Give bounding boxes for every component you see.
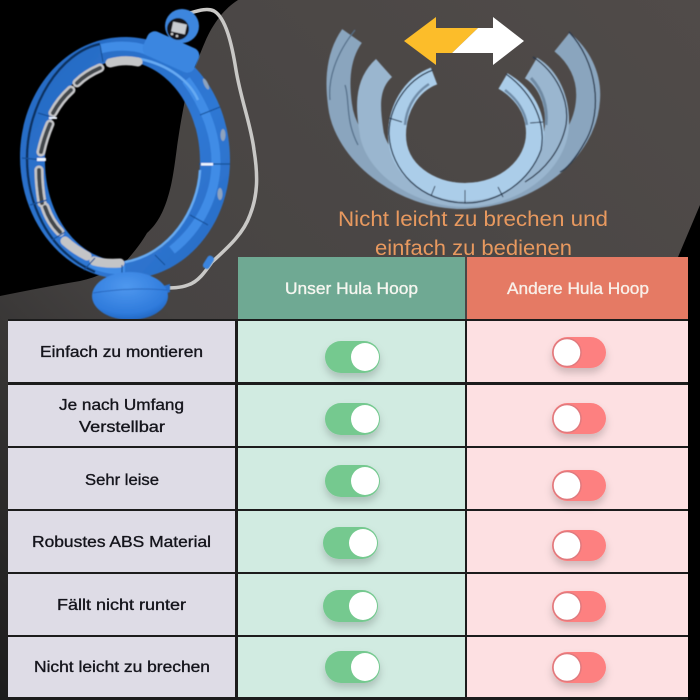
orange caption: einfach zu bedienen <box>375 237 572 260</box>
row labels: Einfach zu montieren <box>40 344 203 361</box>
header: others <box>467 257 688 319</box>
hula hoop product <box>20 9 230 320</box>
row labels: Robustes ABS Material <box>32 534 211 551</box>
front flexing hoop <box>389 70 543 203</box>
header: ours <box>238 257 465 319</box>
other column cells <box>467 321 688 697</box>
green toggles <box>323 341 380 683</box>
middle flexing hoop <box>369 57 567 195</box>
cable of hula hoop <box>165 10 257 288</box>
hoop segment lines <box>22 45 230 280</box>
comparison table <box>8 257 688 700</box>
red toggles <box>552 337 606 683</box>
orange caption: Nicht leicht zu brechen und <box>338 208 608 231</box>
hoop clamp <box>140 29 202 75</box>
orange caption <box>338 208 608 260</box>
row labels: Fällt nicht runter <box>57 597 186 614</box>
flex demonstration hoops <box>330 30 595 203</box>
label column <box>8 321 235 697</box>
row labels: Nicht leicht zu brechen <box>34 659 210 676</box>
hoop ring <box>20 37 230 279</box>
arrow left <box>404 17 478 65</box>
arrow right <box>452 17 524 65</box>
hoop right band highlight <box>90 46 216 270</box>
our column cells <box>238 321 465 697</box>
hoop light slits and ovals <box>37 78 226 200</box>
digital counter display <box>165 9 199 43</box>
hoop windows <box>39 61 138 263</box>
hoop inner bevel <box>125 59 200 262</box>
header: ours: Unser Hula Hoop <box>285 280 418 298</box>
header: others: Andere Hula Hoop <box>507 280 649 298</box>
row labels <box>32 344 211 676</box>
cable connector <box>202 254 215 270</box>
row labels: Sehr leise <box>85 472 159 489</box>
row labels: Verstellbar <box>79 419 165 436</box>
outer flexing hoop <box>330 30 595 197</box>
row labels: Je nach Umfang <box>59 397 184 414</box>
hoop outer dark groove <box>27 44 100 272</box>
air ball <box>92 272 170 320</box>
